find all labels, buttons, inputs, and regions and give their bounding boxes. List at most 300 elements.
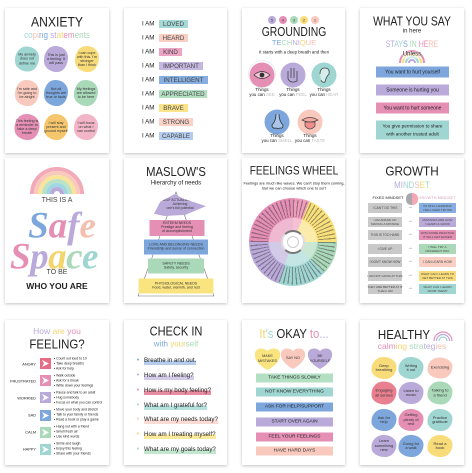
row: brave: I AM — [142, 104, 154, 112]
list: sad: • Read a book or play a game — [54, 418, 99, 422]
poster: feelings wheel — [242, 158, 345, 303]
tag: capable: CAPABLE — [162, 132, 190, 140]
subtitle: how are you: How are you — [33, 326, 81, 336]
blob: statement 2 — [44, 46, 68, 72]
row 7 — [368, 284, 402, 294]
result 5: I CAN LEARN HOW — [423, 260, 452, 264]
blob: going for a walk: a walk — [405, 445, 417, 450]
blob: engaging all senses: Engaging — [376, 388, 392, 393]
blob: writing it out: Writing — [405, 363, 417, 368]
tier: physiological needs — [138, 278, 214, 294]
band: hurt someone — [376, 102, 449, 114]
blob: learn something new — [372, 435, 396, 457]
blob: learn something new: something — [375, 443, 393, 448]
blob: statement 1 — [15, 46, 39, 72]
label: feel: Things — [286, 87, 300, 92]
blob: statement 9: I will focus — [77, 121, 94, 125]
band: not know everything — [256, 388, 333, 396]
blob: statement 2: This is just — [47, 53, 65, 57]
poster: grounding technique — [242, 8, 345, 153]
blob: statement 4 — [15, 80, 39, 106]
blob: going for a walk — [398, 435, 424, 457]
list: angry: • Take deep breaths — [54, 361, 84, 365]
icon: sad arrow — [40, 410, 51, 421]
tier: esteem needs: of accomplishment — [162, 229, 192, 233]
poster: I am affirmations — [124, 8, 227, 153]
list: calm: • Smell fresh air — [54, 429, 78, 433]
list: frustrated: • Walk outside — [54, 373, 75, 377]
blob: ask for help: Ask for — [378, 415, 390, 420]
blob: statement 7 — [14, 114, 40, 140]
blob: statement 4: I'm safe and — [17, 87, 37, 91]
list: frustrated — [54, 373, 94, 388]
row 3: THIS IS TOO HARD — [371, 233, 399, 237]
blob: statement 8 — [44, 114, 68, 140]
tag: heard — [159, 34, 188, 42]
arrow 5: → — [408, 258, 412, 264]
tag: appreciated: APPRECIATED — [161, 90, 205, 98]
subtitle: with yourself: with yourself — [154, 340, 198, 349]
poster: maslow's hierarchy — [124, 158, 227, 303]
row 5 — [368, 257, 402, 267]
band: have hard days: HAVE HARD DAYS — [274, 448, 315, 454]
label: hear — [310, 87, 338, 97]
poster: how are you feeling — [5, 320, 109, 465]
tier: safety needs: SAFETY NEEDS — [162, 261, 190, 265]
list: worried — [54, 390, 102, 405]
countdown dots 5 to 1 — [268, 16, 319, 24]
label: smell: Things — [270, 133, 284, 138]
countdown dots 5 to 1: 1 — [314, 18, 317, 22]
label: taste: Things — [303, 133, 317, 138]
row: capable: I AM — [142, 132, 154, 140]
title: what you say: WHAT YOU SAY — [373, 14, 451, 29]
tag: kind: KIND — [163, 48, 178, 56]
band: start over — [256, 418, 333, 426]
label: taste — [294, 133, 325, 143]
title: healthy: HEALTHY — [378, 328, 430, 342]
item: needs: What are my needs today? — [144, 416, 218, 423]
row 6: I AM NOT GOOD AT THIS — [368, 274, 402, 278]
blob: talking to a friend: a friend — [433, 392, 447, 397]
text: this is a: THIS IS A — [42, 197, 72, 204]
bullet 2: • — [137, 372, 139, 379]
wheel: hub — [281, 230, 305, 254]
blob: going for a walk: Going for — [403, 441, 419, 446]
label: hear: Things — [317, 87, 331, 92]
list: angry — [54, 356, 87, 371]
item: grateful: What am I grateful for? — [144, 402, 207, 409]
title: feeling: FEELING? — [29, 337, 85, 352]
blob: engaging all senses: all senses — [375, 392, 393, 397]
icon: brain — [406, 193, 418, 205]
row 2 — [368, 217, 402, 227]
item: feeling: How am I feeling? — [144, 372, 194, 379]
blob: statement 7: a reminder to — [16, 123, 38, 127]
tier: self actualization: SELF ACTUALIZATION — [162, 198, 198, 202]
tag: kind — [159, 48, 182, 56]
text: who you are: WHO YOU ARE — [26, 281, 88, 291]
band: someone hurting you — [376, 84, 449, 96]
list: worried: • Hug somebody — [54, 395, 79, 399]
result 5 — [419, 257, 456, 267]
word: safe: Safe — [28, 205, 96, 246]
list: calm: • Hang out with a friend — [54, 424, 89, 428]
title: feelings wheel: FEELINGS WHEEL — [250, 163, 338, 177]
result 4: I WILL TRY A — [429, 245, 446, 249]
row 1 — [368, 203, 402, 213]
blob: getting plenty of rest: plenty of — [403, 417, 419, 422]
blob: exercising — [428, 358, 452, 378]
result 4: DIFFERENT WAY — [425, 249, 450, 253]
icon: hand — [280, 62, 306, 88]
blob: statement 8: present and — [46, 125, 66, 129]
row 7: THAN I AM — [377, 289, 392, 293]
blob: getting plenty of rest: rest — [408, 421, 414, 426]
blob: statement 3 — [75, 46, 99, 72]
wheel: inner lighter ring — [269, 218, 317, 266]
band: ask for help: ASK FOR HELP/SUPPORT — [265, 404, 324, 410]
label: fixed mindset: FIXED MINDSET — [373, 195, 403, 200]
list: happy: • Enjoy this feeling — [54, 446, 82, 450]
blob: exercising: Exercising — [431, 365, 449, 370]
blob: statement 1: My anxiety — [18, 53, 36, 57]
tag: important: IMPORTANT — [163, 62, 199, 70]
blob: talking to a friend: Talking to — [432, 388, 448, 393]
result 6: WHAT CAN I LEARN TO — [421, 272, 454, 276]
heart: say no: SAY NO — [286, 356, 300, 360]
blob: deep breathing — [372, 357, 396, 379]
icon: tongue — [298, 110, 322, 134]
band: ask for help — [256, 402, 333, 412]
band: start over: START OVER AGAIN — [271, 420, 318, 424]
blob: statement 7: breath — [22, 131, 32, 135]
blob: statement 6 — [74, 80, 98, 106]
row: strong: I AM — [142, 118, 154, 126]
blob: statement 3: stronger — [80, 59, 94, 63]
result 7: WHAT CAN I LEARN — [423, 285, 452, 289]
row 4: I GIVE UP — [378, 247, 392, 251]
label: growth mindset: GROWTH MINDSET — [418, 195, 456, 200]
result 7: FROM THEM? — [428, 289, 447, 293]
tier: self actualization: Achieving — [173, 202, 187, 206]
poster: anxiety coping statements — [5, 8, 109, 153]
item: goals: What are my goals today? — [144, 446, 216, 453]
blob: statement 7: This feeling is — [16, 119, 38, 123]
label: see: you can SEE — [249, 92, 275, 97]
tier: safety needs: Safety, security — [164, 265, 188, 269]
tier: physiological needs: PHYSIOLOGICAL NEEDS — [155, 281, 197, 285]
title: grounding: GROUNDING — [262, 25, 326, 39]
countdown dots 5 to 1: 4 — [282, 18, 285, 22]
blob: statement 2: will pass — [49, 61, 63, 65]
label: angry: ANGRY — [22, 362, 36, 366]
tier: love and belonging: Friendship and sense of connection — [148, 246, 204, 250]
blob: learn something new: new — [380, 447, 388, 452]
blob: statement 6: My feelings — [77, 87, 95, 91]
blob: statement 9 — [74, 114, 98, 140]
result 6: GET BETTER AT THIS — [422, 276, 453, 280]
wheel: core ring — [287, 236, 299, 248]
poster: check in — [124, 320, 227, 465]
label: sad: SAD — [28, 412, 36, 418]
heart: make mistakes — [254, 348, 280, 370]
poster: growth mindset — [360, 158, 464, 303]
blob: practice gratitude — [428, 409, 452, 431]
arrow 2: → — [408, 218, 412, 224]
list: worried: • Focus on what you can control — [54, 401, 102, 405]
heart: be yourself: BE — [317, 354, 323, 358]
blob: statement 6: to be here — [78, 95, 94, 99]
poster: it's okay to — [242, 320, 345, 465]
blob: deep breathing: breathing — [376, 367, 392, 372]
band: take things slowly: TAKE THINGS SLOWLY — [268, 376, 321, 380]
blob: engaging all senses — [372, 382, 396, 404]
bullet 7: • — [137, 446, 139, 453]
icon: calm arrow — [40, 427, 51, 438]
row 5: I DON'T KNOW HOW — [370, 260, 400, 264]
heart: make mistakes: MAKE — [262, 354, 273, 358]
blob: statement 6: are allowed — [77, 91, 95, 95]
list: frustrated: • Write down your feelings — [54, 384, 93, 388]
pyramid outline — [138, 191, 214, 296]
tier: love and belonging — [144, 240, 208, 254]
tier: esteem needs: Prestige and feeling — [161, 225, 193, 229]
blob: statement 4: be alright — [19, 95, 35, 99]
affirmation list — [142, 20, 208, 140]
tier: self actualization — [154, 194, 206, 216]
tag: intelligent: INTELLIGENT — [164, 76, 203, 84]
icon: eye — [248, 60, 276, 88]
text: intro: Feelings are much like waves. We can't stop them coming, — [243, 181, 345, 186]
band: permission to share: You give permission to share — [382, 124, 443, 129]
arrow 1: → — [408, 204, 412, 210]
result 2: MISTAKES ARE HOW — [423, 218, 452, 222]
label: happy: HAPPY — [23, 446, 36, 452]
icon: angry arrow — [40, 358, 51, 369]
bullet 1: • — [137, 357, 139, 364]
blob: statement 3: I can cope — [78, 51, 96, 55]
label: hear: you can HEAR — [310, 92, 338, 97]
blob: statement 9: can control — [77, 129, 95, 133]
item: treating: How am I treating myself? — [144, 431, 216, 438]
arrow 7: → — [408, 285, 412, 291]
result 1: I'M STILL LEARNING — [423, 204, 452, 208]
blob: talking to a friend — [428, 382, 452, 404]
blob: statement 5: thoughts are — [46, 91, 66, 95]
blob: writing it out — [398, 357, 424, 379]
blob: statement 5: Not all — [51, 87, 61, 91]
icon: rainbow — [30, 167, 84, 194]
icon: frustrated arrow — [40, 375, 51, 386]
bullet 4: • — [137, 402, 139, 409]
blob: ask for help: help — [380, 419, 388, 424]
blob: statement 8: ground myself — [44, 129, 68, 133]
label: see — [249, 87, 275, 97]
blob: listen to music: music — [406, 392, 416, 397]
band: hurt yourself — [376, 66, 449, 78]
blob: practice gratitude: Practice — [433, 415, 447, 420]
item: body: How is my body feeling? — [144, 387, 211, 394]
blob: statement 7: take a deep — [17, 127, 37, 131]
list: angry: • Count out loud to 10 — [54, 356, 87, 360]
blob: practice gratitude: gratitude — [432, 419, 448, 424]
band: have hard days — [256, 446, 333, 456]
label: feel — [279, 87, 307, 97]
tag: brave: BRAVE — [163, 104, 184, 112]
title: check in: CHECK IN — [150, 324, 202, 339]
result 1 — [419, 203, 456, 213]
wheel: tick ring — [249, 198, 337, 286]
tag: brave — [159, 104, 188, 112]
band: hurt someone: You want to hurt someone — [384, 105, 441, 111]
result 3: IT WILL GET EASIER — [423, 235, 452, 239]
blob: statement 4: I'm going to — [18, 91, 36, 95]
result 2: I LEARN & GROW — [425, 222, 450, 226]
heart: make mistakes: MISTAKES — [258, 359, 277, 363]
blob: getting plenty of rest: Getting — [405, 412, 417, 417]
band: permission to share: with another trusted adult — [386, 131, 439, 136]
result 1: I WILL KEEP TRYING — [423, 208, 452, 212]
row: loved: I AM — [142, 20, 154, 28]
subtitle: technique: TECHNIQUE — [272, 38, 316, 47]
result 4 — [419, 244, 456, 254]
list: frustrated: • Ask for a break — [54, 378, 79, 382]
blob: writing it out: it out — [407, 367, 415, 372]
arrow 4: → — [408, 245, 412, 251]
blob: statement 5 — [44, 80, 68, 106]
row 1: I CAN'T DO THIS — [373, 206, 397, 210]
blob: statement 1: define me — [19, 61, 35, 65]
row: appreciated: I AM — [142, 90, 154, 98]
list: sad — [54, 407, 99, 422]
heart: be yourself: YOURSELF — [310, 359, 331, 363]
blob: read a book: Read a — [434, 441, 446, 446]
subtitle: mindset: MINDSET — [394, 180, 430, 190]
list: angry: • Ask for help — [54, 367, 74, 371]
tag: strong — [159, 118, 193, 126]
blob: listen to music — [398, 382, 424, 404]
label: worried: WORRIED — [17, 396, 36, 400]
text: intro: It starts with a deep breath and then — [259, 50, 329, 55]
tier: love and belonging: LOVE AND BELONGING NEEDS — [149, 242, 203, 246]
blob: statement 1: does not — [20, 57, 34, 61]
icon: worried arrow — [40, 392, 51, 403]
result 3: WITH MORE PRACTICE — [421, 231, 454, 235]
blob: learn something new: Learn — [379, 438, 389, 443]
text: in here: in here — [403, 29, 421, 35]
label: feel: you can FEEL — [279, 92, 307, 97]
title: anxiety: ANXIETY — [31, 14, 83, 29]
list: sad: • Talk to your family or friends — [54, 412, 98, 416]
countdown dots 5 to 1: 5 — [271, 18, 274, 22]
blob: statement 2: a feeling. It — [47, 57, 65, 61]
text: unless: Unless — [403, 52, 421, 58]
row: intelligent: I AM — [142, 76, 154, 84]
tag: strong: STRONG — [163, 118, 189, 126]
result 6 — [419, 271, 456, 281]
blob: read a book — [428, 435, 452, 457]
poster: healthy calming strategies — [360, 320, 464, 465]
subtitle: coping statements: coping statements — [24, 30, 90, 40]
row: heard: I AM — [142, 34, 154, 42]
blob: statement 3: with this. I'm — [77, 55, 97, 59]
label: frustrated: FRUSTRATED — [10, 378, 36, 384]
subtitle: stays in here: STAYS IN HERE — [386, 39, 438, 49]
band: feel your feelings: FEEL YOUR FEELINGS — [268, 434, 320, 440]
tier: esteem needs: ESTEEM NEEDS — [163, 221, 191, 225]
tag: heard: HEARD — [163, 34, 184, 42]
text: to be: TO BE — [47, 269, 67, 276]
band: feel your feelings — [256, 432, 333, 442]
list: happy — [54, 441, 91, 456]
label: see: Things — [255, 87, 269, 92]
row 2: MAKING A MISTAKE — [371, 222, 399, 226]
title: growth: GROWTH — [385, 164, 439, 179]
heart: say no — [280, 348, 306, 369]
band: permission to share — [376, 120, 449, 140]
row 3 — [368, 230, 402, 240]
result 2 — [419, 217, 456, 227]
row 7: THEY ARE BETTER AT IT — [367, 285, 403, 289]
blob: statement 9: on what I — [78, 125, 93, 129]
bullet 6: • — [137, 431, 139, 438]
title: it's okay to: It's OKAY to... — [259, 327, 329, 341]
band: take things slowly — [256, 374, 333, 382]
blob: ask for help — [372, 409, 396, 431]
tier: esteem needs — [150, 220, 204, 236]
row: important: I AM — [142, 62, 154, 70]
heart: be yourself — [307, 347, 333, 370]
list: calm: • Use kind words — [54, 435, 79, 439]
result 3 — [419, 230, 456, 240]
list: worried: • Pause and talk to an adult — [54, 390, 95, 394]
chart: feelings wheel — [249, 198, 337, 286]
band: hurt yourself: You want to hurt yourself — [385, 69, 440, 75]
row 2: I AM AFRAID OF — [374, 218, 396, 222]
icon: ear — [312, 62, 336, 88]
blob: listen to music: Listen to — [403, 388, 419, 393]
row: kind: I AM — [142, 48, 154, 56]
blob: statement 8: I will stay — [48, 121, 63, 125]
blob: deep breathing: Deep — [379, 363, 389, 368]
icon: small rainbow — [399, 50, 425, 63]
text: intro: But we can choose which one to surf — [262, 186, 326, 191]
tier: physiological needs: Food, water, warmth, and rest — [152, 285, 200, 289]
item: breathe: Breathe in and out. — [144, 357, 196, 364]
countdown dots 5 to 1: 3 — [293, 18, 296, 22]
poster: safe space — [5, 158, 109, 303]
band: not know everything: NOT KNOW EVERYTHING — [265, 390, 324, 394]
label: smell: you can SMELL — [261, 138, 293, 143]
countdown dots 5 to 1: 2 — [303, 18, 306, 22]
bullet 5: • — [137, 416, 139, 423]
icon: happy arrow — [40, 444, 51, 455]
list: happy: • Share with your friends — [54, 452, 91, 456]
blob: getting plenty of rest — [398, 409, 424, 431]
icon: small rainbow — [433, 330, 453, 342]
tier: self actualization: one's full potential — [166, 206, 194, 210]
subtitle: hierarchy of needs: Hierarchy of needs — [151, 181, 201, 187]
blob: read a book: book — [436, 445, 444, 450]
label: taste: you can TASTE — [295, 138, 325, 143]
label: smell — [261, 133, 293, 143]
text: intro — [243, 181, 345, 191]
poster: what you say — [360, 8, 464, 153]
list: happy: • Smile and laugh — [54, 441, 80, 445]
list: calm — [54, 424, 89, 439]
row 4 — [368, 244, 402, 254]
